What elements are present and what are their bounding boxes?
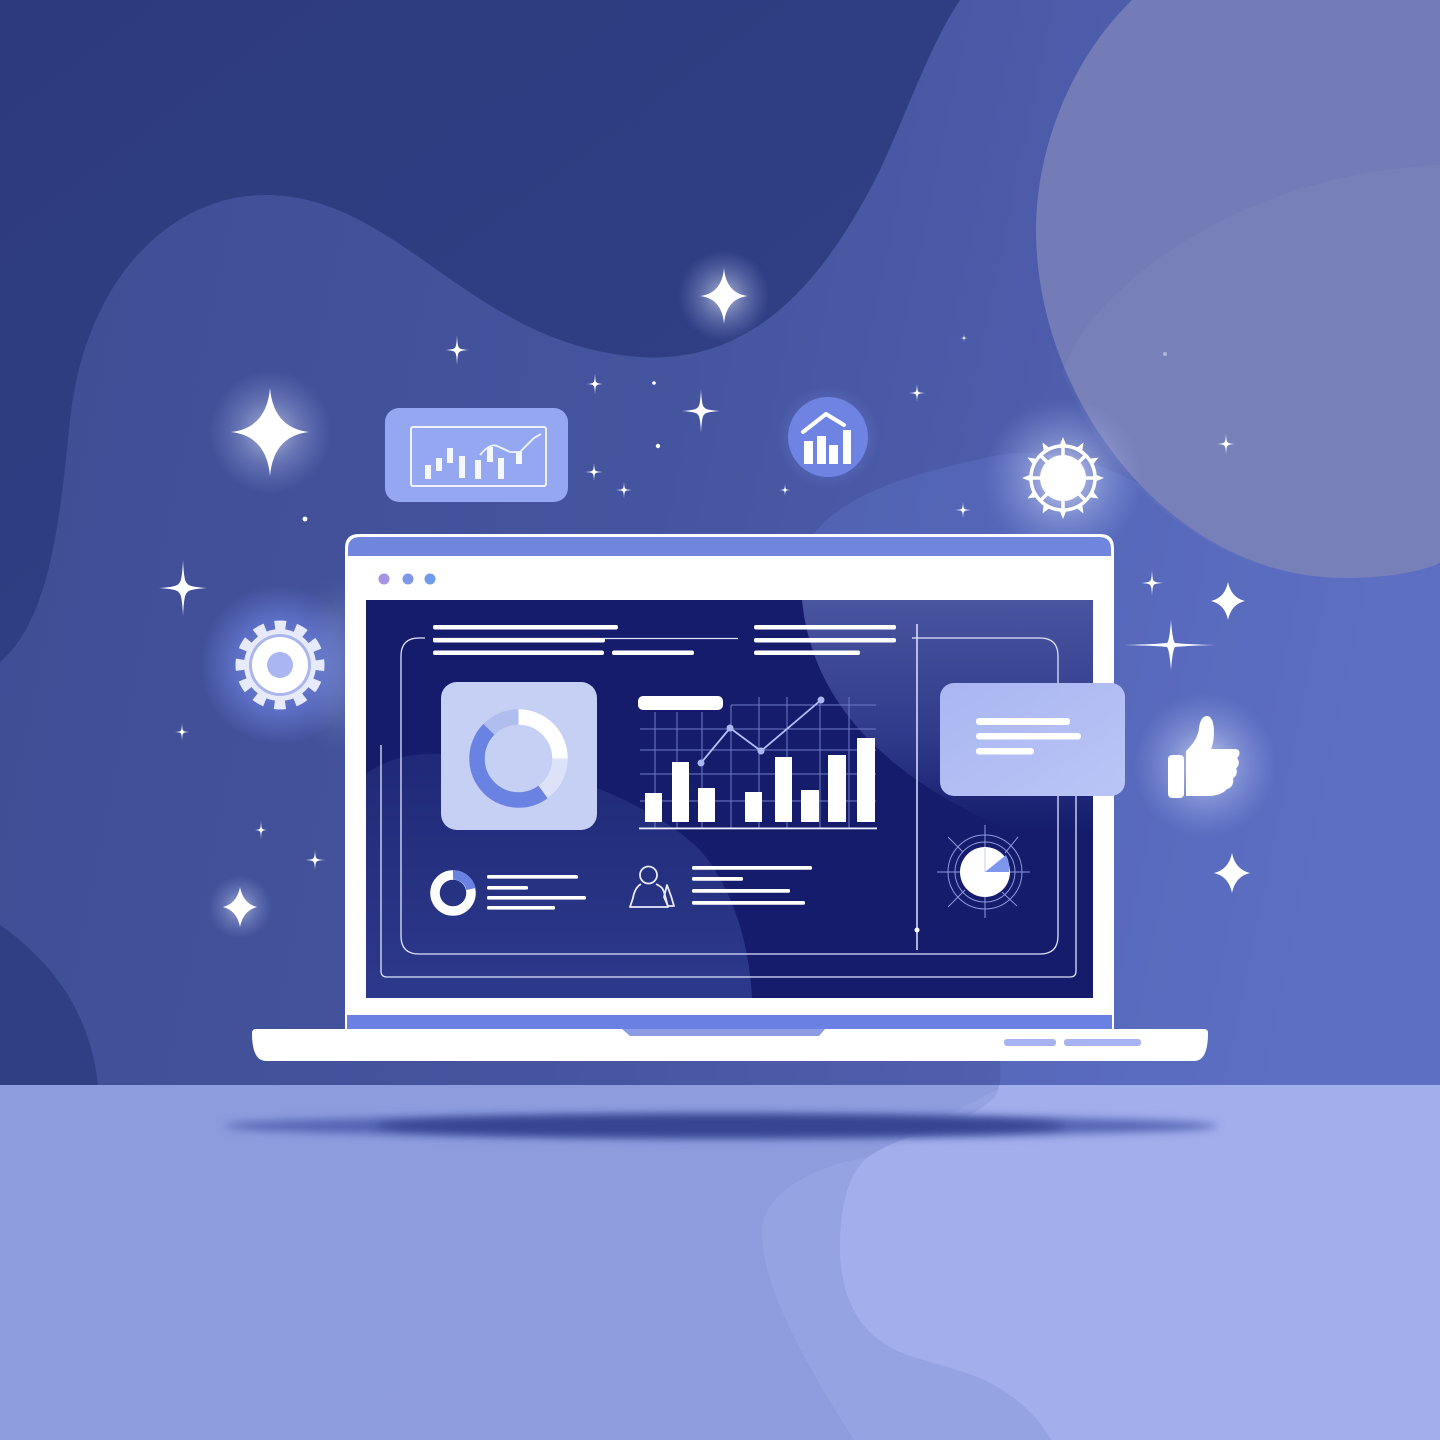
laptop lid	[345, 534, 1114, 1030]
small donut with lines	[435, 875, 586, 911]
bar and line chart	[638, 696, 877, 829]
radar pie	[937, 825, 1030, 918]
background circle inner highlight	[1062, 165, 1440, 578]
person with lines	[630, 866, 812, 907]
background soft blob near laptop	[800, 453, 1440, 1085]
icon: glowing sun gear	[983, 398, 1143, 558]
background large circle	[1036, 0, 1440, 578]
lid bottom bar	[347, 1015, 1112, 1029]
header text lines	[433, 625, 896, 655]
laptop shadow	[224, 1115, 1218, 1137]
screen frame lines	[381, 624, 1076, 977]
floor blob inner	[840, 1085, 1440, 1440]
floor blob	[762, 1085, 1440, 1440]
floating chart card	[385, 408, 568, 502]
floor	[0, 1085, 1440, 1440]
background flowing blob	[0, 0, 1440, 1085]
icon: left gear	[200, 585, 360, 745]
base indicators	[1004, 1039, 1141, 1046]
laptop base	[252, 1029, 1208, 1061]
laptop glow	[330, 600, 354, 730]
donut card	[441, 682, 597, 830]
laptop	[252, 534, 1208, 1061]
icon: thumbs up	[1133, 693, 1277, 837]
background base	[0, 0, 1440, 1085]
window dots	[378, 574, 436, 584]
floating note card	[940, 683, 1125, 796]
lid top bar	[348, 537, 1111, 556]
icon: house growth badge	[776, 385, 880, 489]
screen	[366, 600, 1093, 998]
sparkle stars	[159, 250, 1250, 939]
laptop notch	[622, 1029, 825, 1036]
